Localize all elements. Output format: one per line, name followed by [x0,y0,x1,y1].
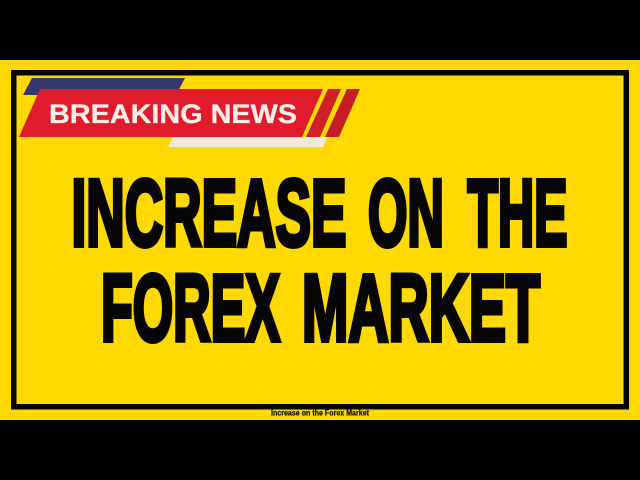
banner slanted stripe one [306,89,341,137]
headline line two: FOREX [101,256,280,362]
yellow panel [0,60,640,420]
breaking news banner [19,78,360,147]
banner red ribbon [19,89,323,137]
black frame [14,73,626,407]
headline line one: ON [368,160,444,266]
banner slanted stripe two [325,89,360,137]
headline line one: INCREASE [72,160,346,266]
footer caption: Increase on the Forex Market [271,408,369,418]
banner navy stripe [23,78,185,95]
banner cream stripe [168,137,327,147]
main headline [72,160,568,362]
banner label: BREAKING NEWS [49,99,297,129]
